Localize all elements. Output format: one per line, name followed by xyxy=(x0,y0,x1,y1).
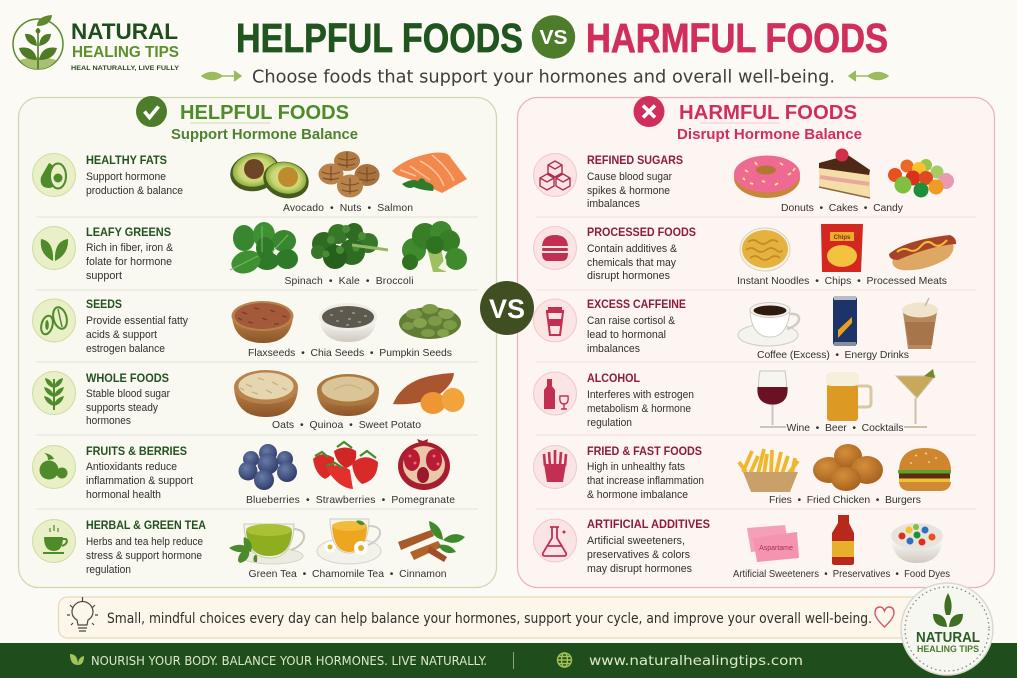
panel heading: helpful foods: HELPFUL FOODS xyxy=(180,101,349,124)
icon: to-go cup xyxy=(534,299,576,342)
food: sweetener, preservatives, food dyes: Aspartame xyxy=(759,545,793,552)
text: refined sugars: Cause blood sugar xyxy=(587,171,672,183)
icon: fries xyxy=(534,446,576,488)
text: artificial additives: ARTIFICIAL ADDITIVES xyxy=(587,519,710,531)
row: seeds xyxy=(32,299,461,359)
text: whole foods: supports steady xyxy=(86,402,159,414)
text: seeds: SEEDS xyxy=(86,299,122,311)
title xyxy=(236,15,888,61)
icon: burger xyxy=(534,226,576,270)
row: healthy fats xyxy=(32,148,467,214)
row: excess caffeine xyxy=(534,296,938,361)
label: foods: Spinach • Kale • Broccoli xyxy=(284,276,414,287)
seal: Natural Healing Tips xyxy=(901,583,993,675)
text: whole foods: WHOLE FOODS xyxy=(86,373,169,385)
icon: light bulb xyxy=(67,597,98,631)
text: seeds: Provide essential fatty xyxy=(86,315,189,327)
food: blueberries, strawberries, pomegranate xyxy=(238,439,450,490)
text: whole foods xyxy=(86,373,170,427)
text: refined sugars xyxy=(587,155,683,210)
text: artificial additives: may disrupt hormones xyxy=(587,563,693,575)
text: herbal and green tea xyxy=(86,520,206,576)
food: oats, quinoa, sweet potato xyxy=(234,370,464,417)
text: herbal and green tea: stress & support hormone xyxy=(86,550,202,562)
text: processed foods: disrupt hormones xyxy=(587,270,671,282)
text: healthy fats: HEALTHY FATS xyxy=(86,155,167,167)
food: green tea, chamomile tea, cinnamon xyxy=(229,519,465,564)
food: spinach, kale, broccoli xyxy=(228,221,467,277)
icon: leaves xyxy=(70,654,84,665)
text: processed foods: PROCESSED FOODS xyxy=(587,227,696,239)
label: foods: Fries • Fried Chicken • Burgers xyxy=(769,495,921,506)
VS badge: VS xyxy=(540,27,568,49)
icon: globe xyxy=(558,653,572,667)
text: artificial additives: preservatives & colors xyxy=(587,549,691,561)
title: HARMFUL FOODS xyxy=(586,15,888,61)
panel: helpful foods xyxy=(18,96,496,588)
subtitle: Choose foods that support your hormones and overall well-being. xyxy=(252,66,835,88)
label: foods: Coffee (Excess) • Energy Drinks xyxy=(757,350,909,361)
text: leafy greens: support xyxy=(86,270,122,282)
text: fruits and berries: Antioxidants reduce xyxy=(86,461,177,473)
text: seeds xyxy=(86,299,189,355)
label: foods: Blueberries • Strawberries • Pomegranate xyxy=(246,495,455,506)
text: processed foods xyxy=(587,227,696,282)
panel heading: harmful foods: Disrupt Hormone Balance xyxy=(677,126,862,143)
panel heading: helpful foods: Support Hormone Balance xyxy=(171,126,358,143)
food: instant noodles, chips, processed meats: Chips xyxy=(834,235,851,241)
title: HELPFUL FOODS xyxy=(236,15,523,61)
text: excess caffeine: lead to hormonal xyxy=(587,329,666,341)
tip text: Small, mindful choices every day can help balance your hormones, support your cycle, and improve your overall well-being. xyxy=(107,611,872,627)
icon: heart xyxy=(875,607,894,627)
row: fruits and berries xyxy=(32,439,455,506)
text: excess caffeine: EXCESS CAFFEINE xyxy=(587,299,686,311)
text: fried and fast foods: that increase inflammation xyxy=(587,475,704,487)
text: alcohol xyxy=(587,373,694,429)
text: refined sugars: spikes & hormone xyxy=(587,185,670,197)
label: foods: Instant Noodles • Chips • Processed Meats xyxy=(737,276,947,287)
panel heading: harmful foods: HARMFUL FOODS xyxy=(679,101,857,124)
icon: wheat xyxy=(32,372,76,414)
food: fries, fried chicken, burger xyxy=(739,444,951,492)
row: artificial additives xyxy=(534,515,950,580)
text: fruits and berries: inflammation & support xyxy=(86,475,193,487)
VS circle between panels xyxy=(480,281,534,335)
text: herbal and green tea: HERBAL & GREEN TEA xyxy=(86,520,206,532)
text: fruits and berries: FRUITS & BERRIES xyxy=(86,446,187,458)
icon: avocado xyxy=(32,154,76,196)
icon: tea cup xyxy=(32,520,76,562)
label: foods: Oats • Quinoa • Sweet Potato xyxy=(272,420,421,431)
food: flaxseeds, chia, pumpkin seeds xyxy=(232,301,461,343)
text: fried and fast foods: & hormone imbalance xyxy=(587,489,688,501)
label: foods: Green Tea • Chamomile Tea • Cinnamon xyxy=(248,569,447,580)
icon: bottle and glass xyxy=(534,372,576,415)
text: processed foods: chemicals that may xyxy=(587,257,677,269)
text: healthy fats xyxy=(86,155,183,197)
icon: leaf xyxy=(32,226,76,270)
text: excess caffeine: imbalances xyxy=(587,343,641,355)
text: whole foods: hormones xyxy=(86,415,132,427)
text: fried and fast foods xyxy=(587,446,704,501)
text: leafy greens: folate for hormone xyxy=(86,256,172,268)
text: leafy greens xyxy=(86,227,174,282)
logo: Natural Healing Tips: HEAL NATURALLY, LIVE FULLY xyxy=(71,65,180,72)
text: fruits and berries: hormonal health xyxy=(86,489,161,501)
text: seeds: acids & support xyxy=(86,329,157,341)
VS badge xyxy=(532,15,575,59)
logo: Natural Healing Tips: HEALING TIPS xyxy=(72,44,179,61)
text: alcohol: ALCOHOL xyxy=(587,373,640,385)
text: healthy fats: Support hormone xyxy=(86,171,166,183)
text: artificial additives xyxy=(587,519,710,575)
food: wine, beer, cocktail xyxy=(757,369,935,427)
food: instant noodles, chips, processed meats xyxy=(740,224,956,272)
text: leafy greens: Rich in fiber, iron & xyxy=(86,242,174,254)
text: artificial additives: Artificial sweeteners, xyxy=(587,535,685,547)
seal: Natural Healing Tips: HEALING TIPS xyxy=(917,644,979,655)
text: herbal and green tea: Herbs and tea help reduce xyxy=(86,536,203,548)
text: healthy fats: production & balance xyxy=(86,185,183,197)
row: refined sugars xyxy=(534,148,954,214)
text: alcohol: metabolism & hormone xyxy=(587,403,691,415)
text: fruits and berries xyxy=(86,446,193,501)
icon: flask xyxy=(534,519,576,562)
panel: harmful foods xyxy=(518,96,994,588)
text: processed foods: Contain additives & xyxy=(587,243,678,255)
text: seeds: estrogen balance xyxy=(86,343,165,355)
slogan: NOURISH YOUR BODY. BALANCE YOUR HORMONES. LIVE NATURALLY. xyxy=(91,653,487,668)
text: refined sugars: imbalances xyxy=(587,198,641,210)
text: alcohol: Interferes with estrogen xyxy=(587,389,694,401)
text: alcohol: regulation xyxy=(587,417,632,429)
footer bar xyxy=(0,643,1017,678)
text: refined sugars: REFINED SUGARS xyxy=(587,155,683,167)
icon: fruit xyxy=(32,446,76,488)
row: herbal and green tea xyxy=(32,519,465,580)
row: leafy greens xyxy=(32,221,467,287)
label: foods: Donuts • Cakes • Candy xyxy=(781,203,904,214)
row: fried and fast foods xyxy=(534,444,951,506)
panel heading: harmful foods xyxy=(634,96,862,143)
icon: sugar cubes xyxy=(534,154,576,196)
row: alcohol xyxy=(534,369,935,434)
row: processed foods xyxy=(534,224,956,287)
label: foods: Artificial Sweeteners • Preservatives • Food Dyes xyxy=(733,569,950,580)
text: fried and fast foods: High in unhealthy fats xyxy=(587,461,686,473)
VS circle between panels: VS xyxy=(489,294,525,324)
logo: Natural Healing Tips xyxy=(13,15,180,72)
food: avocado, nuts, salmon xyxy=(227,148,467,203)
text: excess caffeine: Can raise cortisol & xyxy=(587,315,676,327)
website: www.naturalhealingtips.com xyxy=(589,653,803,669)
label: foods: Flaxseeds • Chia Seeds • Pumpkin Seeds xyxy=(248,348,452,359)
row: whole foods xyxy=(32,370,464,431)
text: whole foods: Stable blood sugar xyxy=(86,388,170,400)
food: sweetener, preservatives, food dyes xyxy=(747,515,943,565)
seal: Natural Healing Tips: NATURAL xyxy=(916,629,980,646)
text: excess caffeine xyxy=(587,299,686,355)
food: donut, cake, candy xyxy=(734,148,954,198)
panel heading: helpful foods xyxy=(136,96,358,143)
label: foods: Wine • Beer • Cocktails xyxy=(786,423,904,434)
text: leafy greens: LEAFY GREENS xyxy=(86,227,171,239)
label: foods: Avocado • Nuts • Salmon xyxy=(283,203,413,214)
food: coffee, energy drink, latte xyxy=(738,296,938,349)
text: fried and fast foods: FRIED & FAST FOODS xyxy=(587,446,702,458)
text: herbal and green tea: regulation xyxy=(86,564,131,576)
logo: Natural Healing Tips: NATURAL xyxy=(71,19,178,44)
icon: seeds xyxy=(32,299,76,342)
tip banner xyxy=(58,597,938,638)
